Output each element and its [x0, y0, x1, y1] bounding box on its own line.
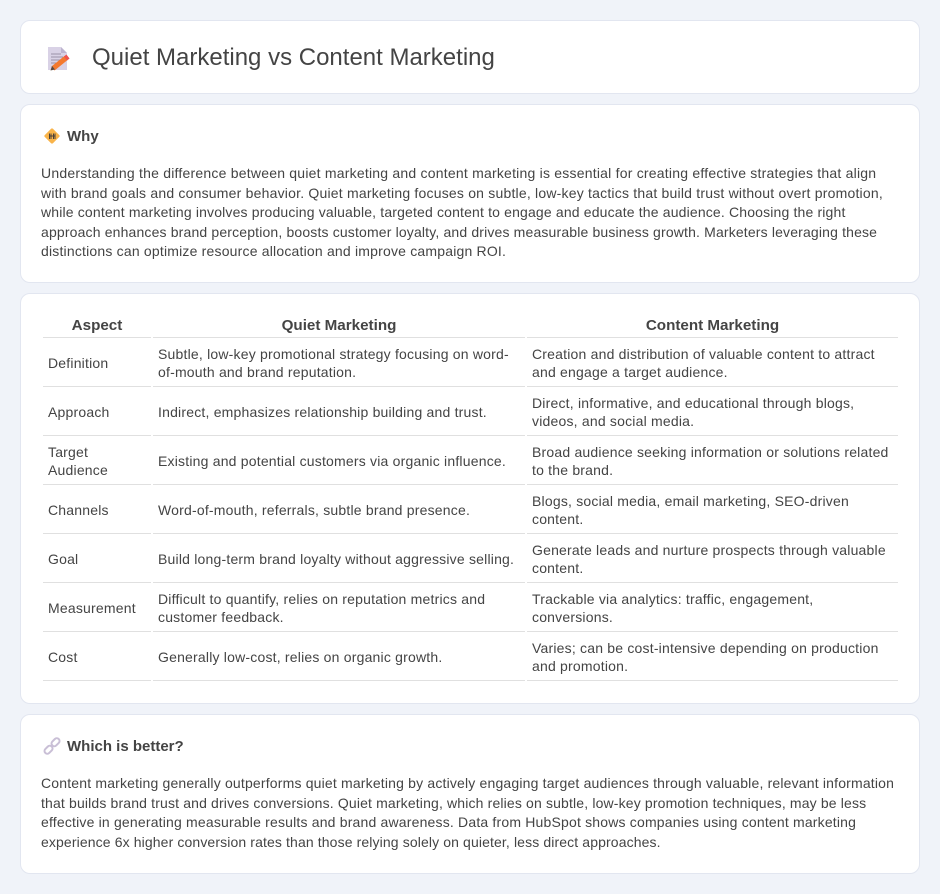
text: which is better paragraph: experience 6x higher conversion rates than those relying solely on quieter, less direct approaches. — [41, 834, 661, 850]
text: which is better paragraph — [41, 775, 894, 850]
text: Blogs, social media, email marketing, SEO-driven — [532, 493, 849, 509]
row: cost: Cost — [48, 649, 78, 665]
table header: quiet marketing: Quiet Marketing — [282, 317, 396, 334]
text: Direct, informative, and educational through blogs, — [532, 395, 854, 411]
text: Word-of-mouth, referrals, subtle brand presence. — [158, 502, 470, 518]
text: Generally low-cost, relies on organic growth. — [158, 649, 442, 665]
row: definition: Definition — [48, 355, 108, 371]
text: which is better paragraph: Content marketing generally outperforms quiet marketing by actively engaging target audiences through valuable, relevant information — [41, 775, 894, 791]
text: which is better paragraph: that builds brand trust and drives conversions. Quiet marketing, which relies on subtle, low-key promotion techniques, may be less — [41, 795, 866, 811]
text: Build long-term brand loyalty without aggressive selling. — [158, 551, 514, 567]
icon: chain link — [44, 737, 60, 755]
heading: which is better: Which is better? — [67, 738, 184, 755]
text: Difficult to quantify, relies on reputation metrics and — [158, 591, 485, 607]
table header: content marketing: Content Marketing — [646, 317, 779, 334]
title: Quiet Marketing vs Content Marketing — [92, 44, 495, 71]
panel: comparison table — [20, 293, 920, 704]
text: to the brand. — [532, 462, 613, 478]
row: channels: Channels — [48, 502, 109, 518]
row: target audience — [48, 444, 108, 478]
table header: aspect: Aspect — [72, 317, 122, 334]
row: target audience: Audience — [48, 462, 108, 478]
text: why paragraph: while content marketing involves producing valuable, targeted content to engage and educate the audience. Choosing the right — [41, 204, 846, 220]
icon: document with pencil — [48, 47, 70, 70]
text: why paragraph: distinctions can optimize resource allocation and improve campaign ROI. — [41, 243, 506, 259]
text: customer feedback. — [158, 609, 284, 625]
panel: why — [20, 104, 920, 283]
text: Generate leads and nurture prospects through valuable — [532, 542, 886, 558]
text: why paragraph: with brand goals and consumer behavior. Quiet marketing focuses on subtle, low-key tactics that build trust without overt promotion, — [41, 185, 883, 201]
text: why paragraph: approach enhances brand perception, boosts customer loyalty, and drives measurable business growth. Marketers leveraging these — [41, 224, 877, 240]
text: why paragraph: Understanding the difference between quiet marketing and content marketing is essential for creating effective strategies that align — [41, 165, 876, 181]
text: and promotion. — [532, 658, 628, 674]
text: and engage a target audience. — [532, 364, 728, 380]
text: Varies; can be cost-intensive depending on production — [532, 640, 879, 656]
text: Subtle, low-key promotional strategy focusing on word- — [158, 346, 509, 362]
row: approach: Approach — [48, 404, 110, 420]
text: Trackable via analytics: traffic, engagement, — [532, 591, 813, 607]
text: Existing and potential customers via organic influence. — [158, 453, 506, 469]
row: target audience: Target — [48, 444, 88, 460]
text: of-mouth and brand reputation. — [158, 364, 356, 380]
text: Indirect, emphasizes relationship building and trust. — [158, 404, 487, 420]
text: Broad audience seeking information or solutions related — [532, 444, 889, 460]
text: which is better paragraph: effective in generating measurable results and brand awareness. Data from HubSpot shows companies using content marketing — [41, 814, 856, 830]
text: content. — [532, 511, 583, 527]
row: measurement: Measurement — [48, 600, 136, 616]
text: why paragraph — [41, 165, 883, 259]
text: Creation and distribution of valuable content to attract — [532, 346, 875, 362]
icon: diamond sign — [44, 128, 60, 144]
text: videos, and social media. — [532, 413, 694, 429]
heading: why: Why — [67, 128, 99, 145]
text: content. — [532, 560, 583, 576]
panel: which is better — [20, 714, 920, 874]
panel: title header — [20, 20, 920, 94]
text: conversions. — [532, 609, 613, 625]
row: goal: Goal — [48, 551, 78, 567]
